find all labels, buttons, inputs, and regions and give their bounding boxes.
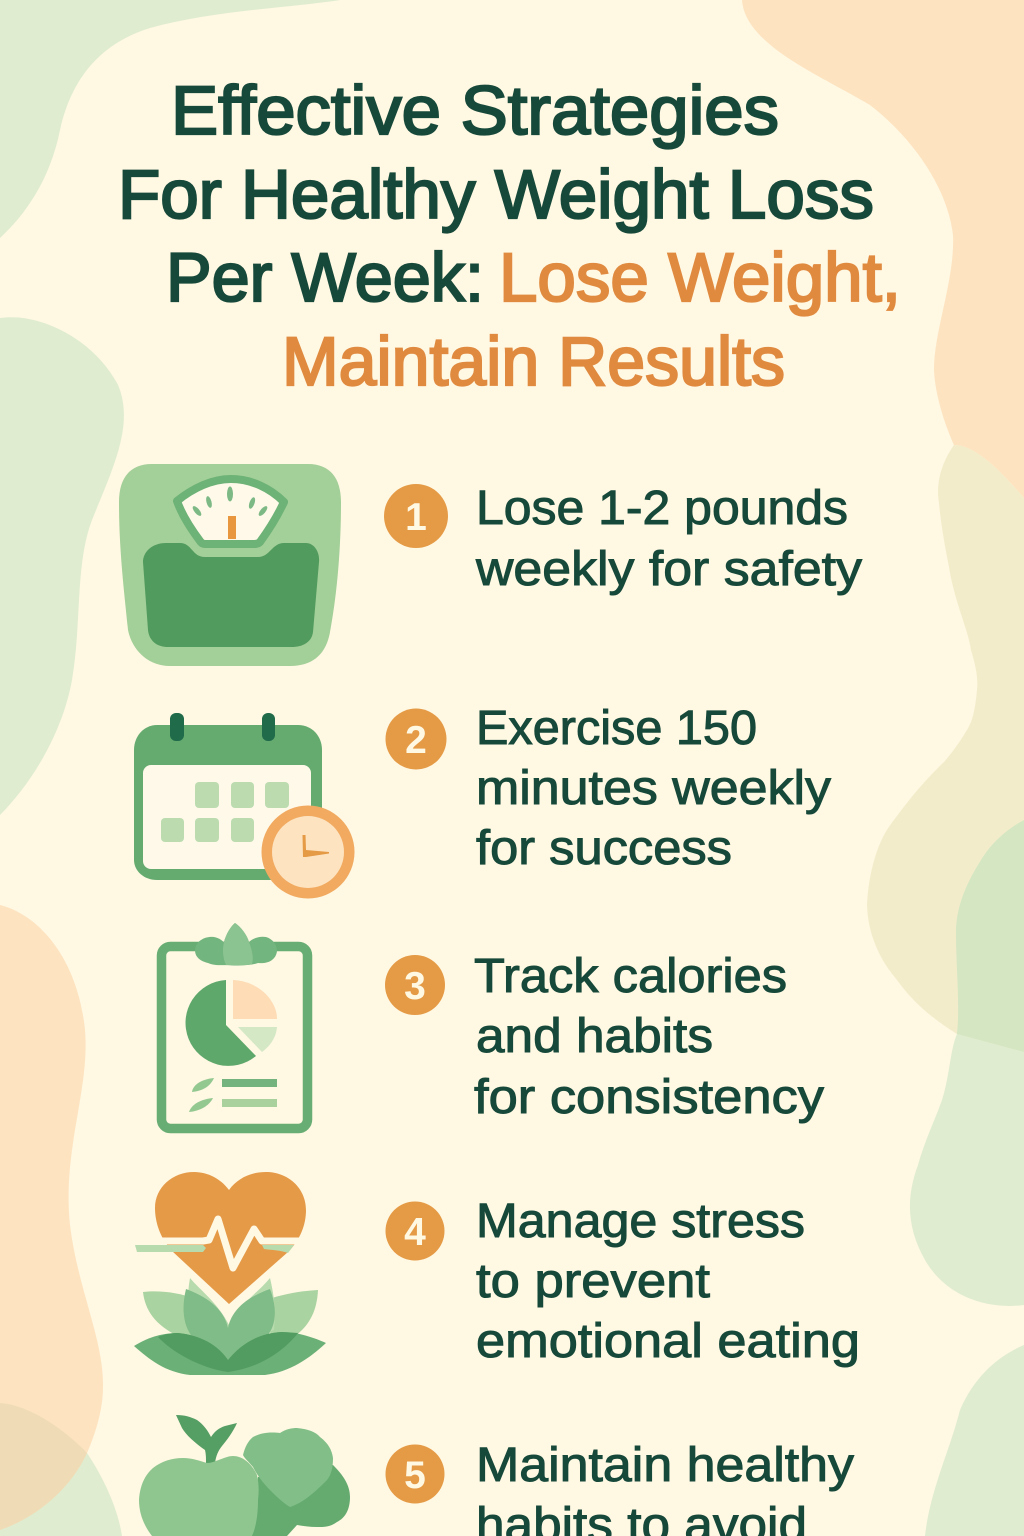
step 4 text: to prevent (476, 1255, 710, 1308)
number badge 5 (386, 1444, 444, 1504)
step 4 text: Manage stress (476, 1195, 805, 1248)
number badge 3 (385, 955, 445, 1015)
icon: bathroom scale (119, 464, 341, 666)
step 5 text (476, 1439, 854, 1536)
step 4 text: emotional eating (476, 1315, 860, 1368)
title: Per Week: (166, 239, 484, 316)
step 3 text (474, 950, 824, 1124)
step 3 text: for consistency (474, 1071, 824, 1124)
step 1 text: weekly for safety (475, 543, 862, 596)
number badge 5: 5 (404, 1454, 426, 1497)
step 2 text: Exercise 150 (476, 702, 757, 755)
title: Lose Weight, (499, 239, 901, 316)
number badge 1: 1 (405, 496, 427, 539)
icon: clipboard with pie chart (162, 923, 308, 1128)
number badge 4 (386, 1202, 444, 1260)
step 3 text: Track calories (474, 950, 787, 1003)
number badge 1 (384, 484, 448, 548)
title: For Healthy Weight Loss (118, 156, 874, 233)
number badge 4: 4 (404, 1211, 426, 1254)
number badge 2: 2 (405, 719, 427, 762)
icon: heart with pulse over lotus (134, 1172, 326, 1375)
step 2 text: minutes weekly (476, 762, 831, 815)
step 3 text: and habits (476, 1010, 713, 1063)
number badge 3: 3 (404, 965, 426, 1008)
title (118, 72, 901, 400)
number badge 2 (386, 708, 446, 770)
step 2 text (476, 702, 831, 875)
step 5 text: Maintain healthy (476, 1439, 854, 1492)
title: Effective Strategies (171, 72, 779, 149)
step 4 text (476, 1195, 860, 1368)
icon: apple and broccoli (139, 1415, 350, 1536)
step 1 text: Lose 1-2 pounds (476, 482, 848, 535)
step 1 text (475, 482, 862, 596)
title: Maintain Results (282, 323, 785, 400)
icon: calendar with clock (134, 713, 354, 898)
step 2 text: for success (476, 822, 732, 875)
